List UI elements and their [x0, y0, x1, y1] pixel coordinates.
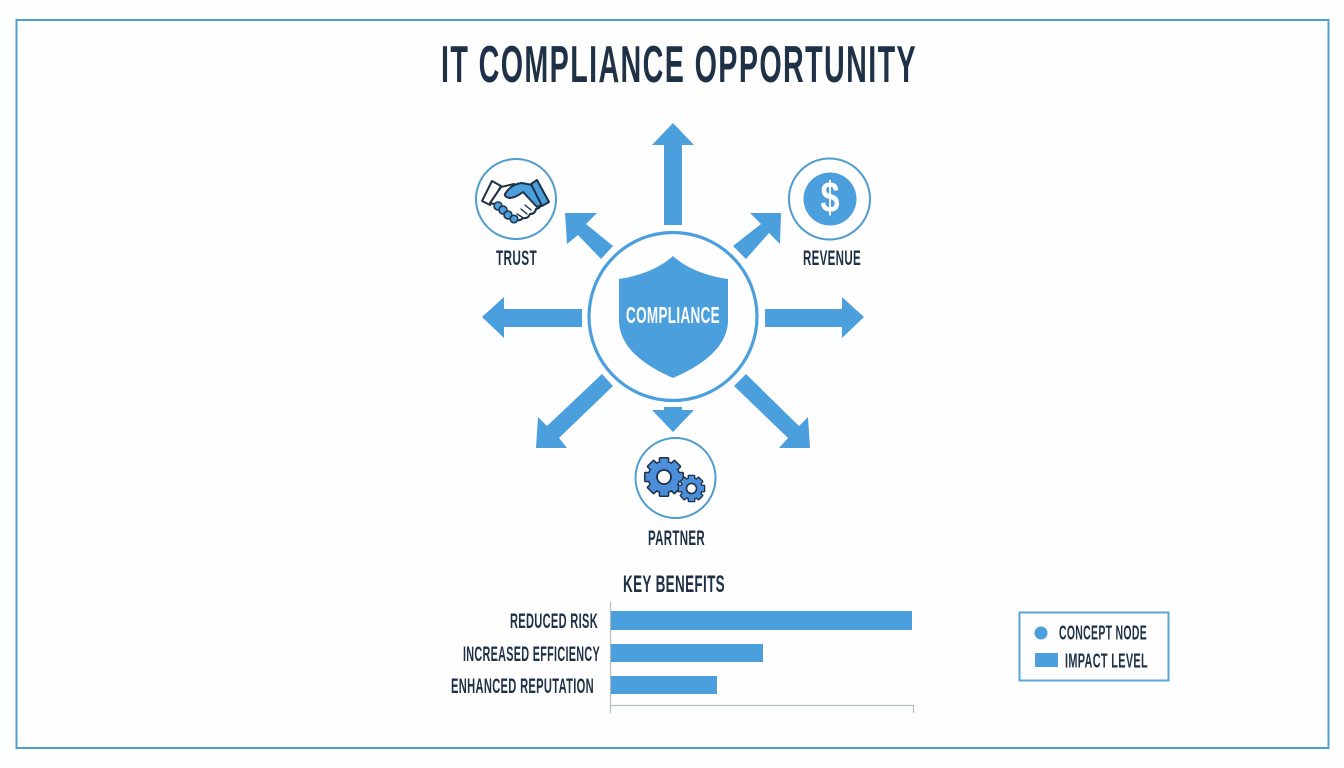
legend item: concept node	[1034, 622, 1147, 644]
icon: gears	[646, 458, 704, 501]
label: partner: PARTNER	[648, 526, 705, 550]
bar: enhanced reputation: ENHANCED REPUTATION	[451, 674, 594, 698]
node: trust	[476, 159, 556, 270]
node ring	[636, 438, 716, 518]
legend item: impact level	[1035, 650, 1148, 672]
arrow: lower left	[536, 374, 613, 448]
arrow: up	[652, 123, 694, 225]
chart axes	[610, 602, 914, 713]
icon: dollar coin: $	[820, 174, 840, 222]
label: revenue: REVENUE	[803, 246, 861, 270]
arrow: down	[652, 407, 694, 432]
arrow: lower right	[734, 374, 810, 448]
arrow: right	[765, 297, 864, 338]
central compliance node	[589, 232, 757, 400]
node ring	[476, 159, 556, 239]
label: trust: TRUST	[496, 246, 537, 270]
arrow: left	[482, 297, 582, 338]
legend item: concept node: CONCEPT NODE	[1059, 622, 1147, 644]
node: partner	[636, 438, 716, 550]
arrow: upper right	[733, 213, 781, 259]
legend	[1020, 612, 1168, 680]
radial arrows	[482, 123, 864, 448]
arrow: upper left	[565, 213, 613, 259]
icon: shield	[619, 256, 728, 378]
bar: reduced risk	[510, 609, 912, 633]
shield label: COMPLIANCE	[626, 302, 720, 328]
node ring	[789, 158, 870, 240]
icon: handshake	[482, 180, 549, 223]
title: IT COMPLIANCE OPPORTUNITY	[441, 36, 917, 94]
bar: increased efficiency: INCREASED EFFICIENCY	[463, 642, 600, 666]
legend item: impact level: IMPACT LEVEL	[1065, 650, 1148, 672]
node: revenue	[789, 158, 870, 270]
chart heading: KEY BENEFITS	[623, 571, 725, 598]
node ring	[589, 232, 757, 400]
bar: reduced risk: REDUCED RISK	[510, 609, 598, 633]
bar chart: key benefits	[451, 571, 914, 713]
legend box	[1020, 612, 1168, 680]
